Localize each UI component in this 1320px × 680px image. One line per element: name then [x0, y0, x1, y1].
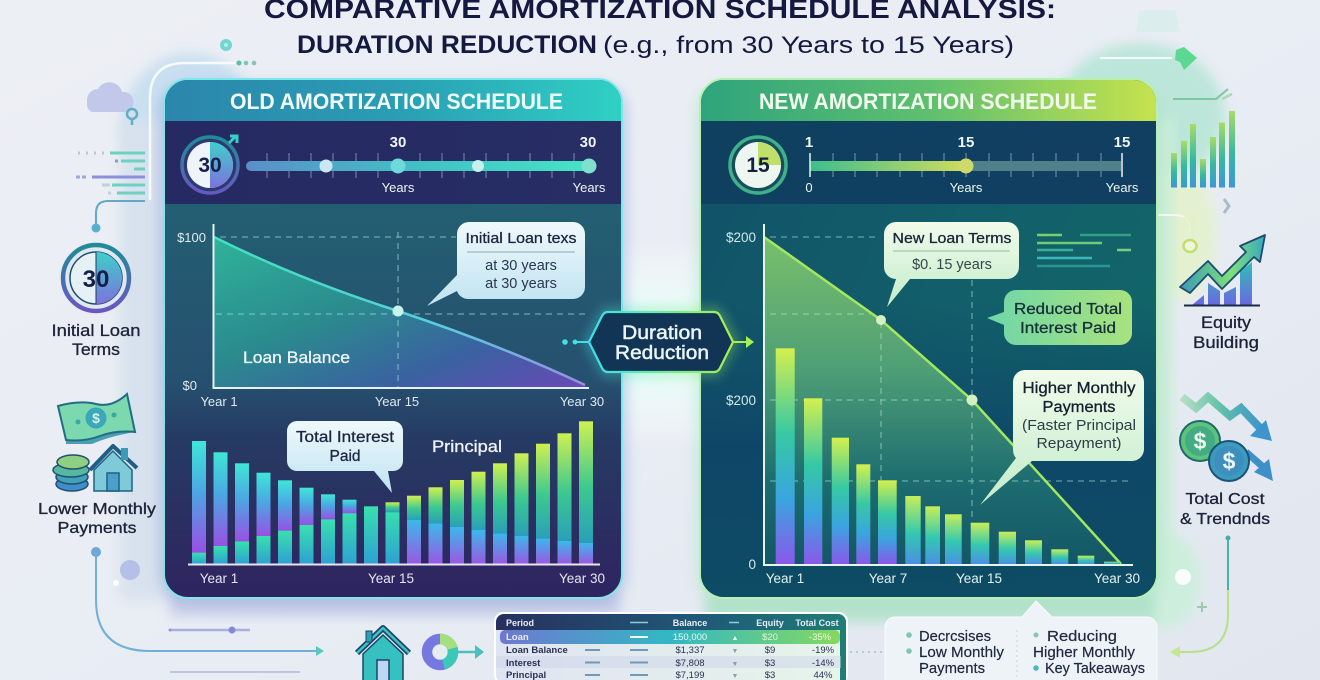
icon: 15 year timer: 15 [746, 154, 770, 177]
timeline scale: new: 15 [958, 134, 974, 151]
bar chart: payments (new): Year 7 [869, 571, 907, 586]
icon: total cost coins and falling arrows: $ [1223, 448, 1236, 474]
line chart: loan balance (old): Year 1 [200, 394, 238, 409]
decoration: top left cloud, pin and connector [76, 39, 256, 232]
label: lower monthly payments: Payments [58, 520, 136, 537]
label: total cost and trends: & Trendnds [1180, 511, 1270, 528]
callout: higher monthly payments: (Faster Principal [1022, 417, 1136, 434]
table rows: $7,808 [675, 658, 705, 669]
callout: reduced total interest paid: Reduced Total [1014, 301, 1122, 318]
label: initial loan terms [52, 322, 140, 359]
table rows: $1,337 [675, 645, 705, 656]
bar chart: interest and principal (old): Year 1 [200, 571, 238, 586]
table rows: -35% [809, 632, 832, 643]
title: (e.g., from 30 Years to 15 Years) [603, 32, 1014, 59]
bar chart: payments (new): Year 15 [956, 571, 1002, 586]
table rows: ▲ [732, 635, 738, 642]
title [264, 0, 1056, 59]
label: principal: Principal [432, 438, 502, 456]
key takeaways box: Higher Monthly [1033, 645, 1136, 661]
badge: duration reduction [562, 312, 754, 372]
line chart: loan balance (new) [726, 230, 1133, 572]
icon: donut chart with arrow [427, 639, 484, 665]
table rows: Loan Balance [506, 645, 568, 656]
callout: initial loan terms: at 30 years [485, 258, 557, 274]
key takeaways box: Low Monthly [919, 645, 1005, 661]
table rows [506, 632, 835, 680]
table rows: $20 [762, 632, 778, 643]
label: lower monthly payments: Lower Monthly [38, 501, 156, 518]
icon: total cost coins and falling arrows [1180, 397, 1273, 481]
table rows: Interest [506, 658, 541, 669]
bar chart: payments (new) [764, 224, 1140, 586]
table rows: Loan [506, 632, 529, 643]
timeline scale: new: Years [1106, 180, 1139, 195]
timeline band: new [701, 121, 1156, 204]
icon: house [357, 628, 409, 680]
bar chart: payments (new): Year 1 [766, 571, 804, 586]
icon: 30 year timer: 30 [198, 154, 222, 177]
table rows: ▼ [732, 661, 738, 668]
panel: old amortization schedule [158, 79, 628, 604]
callout: new loan terms [884, 222, 1019, 307]
table rows: 150,000 [673, 632, 707, 643]
line chart: loan balance (old): Year 15 [375, 394, 419, 409]
label: total cost and trends: Total Cost [1186, 491, 1265, 508]
line chart: loan balance (new): $200 [726, 230, 756, 245]
line chart: loan balance (old): $0 [183, 378, 197, 393]
bar chart: payments (new): Year 30 [1094, 571, 1140, 586]
callout: initial loan terms: at 30 years [485, 276, 557, 292]
bar chart: interest and principal (old): Year 15 [368, 571, 414, 586]
table rows: $3 [765, 658, 775, 669]
key takeaways box: Reducing [1047, 629, 1117, 645]
timeline scale: new: Years [950, 180, 983, 195]
timeline scale: old: 30 [390, 134, 406, 151]
timeline band: old [165, 121, 621, 204]
key takeaways box: Decrcsises [919, 629, 991, 645]
key takeaways box: Key Takeaways [1045, 661, 1145, 677]
table rows: $9 [765, 645, 775, 656]
bar chart: interest and principal (old): Year 30 [559, 571, 605, 586]
timeline scale: new: 1 [805, 134, 813, 151]
label: initial loan terms: Initial Loan [52, 322, 140, 340]
label: loan balance: Loan Balance [243, 348, 350, 367]
label: equity building [1193, 314, 1259, 352]
icon: total cost coins and falling arrows: $ [1194, 428, 1207, 454]
panel header: old [165, 80, 621, 121]
icon: money, coins and house [53, 394, 137, 491]
timeline scale: new: 15 [1114, 134, 1130, 151]
label: total cost and trends [1180, 491, 1270, 528]
panel header: new [701, 80, 1156, 121]
bar chart: interest and principal (old) [188, 421, 605, 586]
table header: Period [506, 618, 534, 628]
label: initial loan terms: Terms [72, 341, 120, 359]
callout: new loan terms: New Loan Terms [892, 230, 1012, 247]
table rows: ▼ [732, 648, 738, 655]
decoration: chevron and ring connector [1158, 199, 1229, 252]
table rows: -14% [812, 658, 835, 669]
panel header: old: OLD AMORTIZATION SCHEDULE [230, 89, 563, 114]
table header: Equity [756, 618, 784, 628]
callout: reduced total interest paid [987, 290, 1132, 345]
callout: initial loan terms [427, 222, 585, 306]
callout: higher monthly payments: Higher Monthly [1022, 380, 1136, 397]
line chart: loan balance (new): 0 [748, 557, 756, 572]
table rows: -19% [812, 645, 835, 656]
dotted connector [850, 651, 885, 653]
callout: initial loan terms: Initial Loan texs [466, 230, 576, 247]
callout: higher monthly payments: Payments [1042, 399, 1116, 416]
decorative background glows [120, 43, 1225, 628]
key takeaways box [885, 601, 1157, 680]
callout: higher monthly payments: Repayment) [1036, 435, 1122, 452]
panel header: new: NEW AMORTIZATION SCHEDULE [759, 89, 1097, 114]
timeline scale: old: Years [573, 180, 606, 195]
icon: mini bar chart [1171, 111, 1235, 188]
icon: initial loan timer: 30 [83, 266, 109, 293]
line chart: loan balance (old): Year 30 [560, 394, 604, 409]
callout: reduced total interest paid: Interest Paid [1020, 320, 1116, 337]
timeline scale: old: 30 [580, 134, 596, 151]
line chart: loan balance (old) [177, 224, 604, 409]
callout: total interest paid: Paid [329, 448, 361, 465]
key takeaways box: Payments [919, 661, 985, 677]
callout: total interest paid: Total Interest [296, 429, 395, 446]
table rows: ▼ [732, 673, 738, 680]
title: DURATION REDUCTION [297, 31, 597, 59]
mini legend lines [1037, 235, 1131, 266]
connector: lower left flow lines [91, 547, 324, 672]
label: equity building: Equity [1201, 314, 1252, 332]
icon: money, coins and house: $ [92, 410, 100, 426]
decoration: top right arrow and trend line [1100, 10, 1232, 99]
callout: higher monthly payments [980, 370, 1144, 505]
icon: equity building arrow [1180, 235, 1265, 306]
label: equity building: Building [1193, 334, 1259, 352]
table header: Balance [673, 618, 707, 628]
icon: initial loan timer [63, 245, 129, 311]
connector: lower right flow [1170, 536, 1230, 658]
callout: total interest paid [287, 421, 403, 493]
comparison table [495, 613, 847, 680]
timeline scale: old: Years [382, 180, 415, 195]
table header [506, 618, 839, 628]
label: lower monthly payments [38, 501, 156, 537]
table header: Total Cost [795, 618, 839, 628]
badge: duration reduction: Duration [622, 322, 702, 344]
icon: 15 year timer [730, 137, 786, 193]
line chart: loan balance (new): $200 [726, 393, 756, 408]
timeline scale: new [805, 134, 1139, 195]
badge: duration reduction: Reduction [615, 342, 709, 364]
timeline scale: new: 0 [805, 180, 813, 195]
callout: new loan terms: $0. 15 years [912, 257, 992, 273]
line chart: loan balance (old): $100 [177, 230, 206, 245]
icon: 30 year timer [182, 136, 238, 193]
timeline scale: old [246, 134, 606, 195]
panel: new amortization schedule [694, 79, 1164, 604]
